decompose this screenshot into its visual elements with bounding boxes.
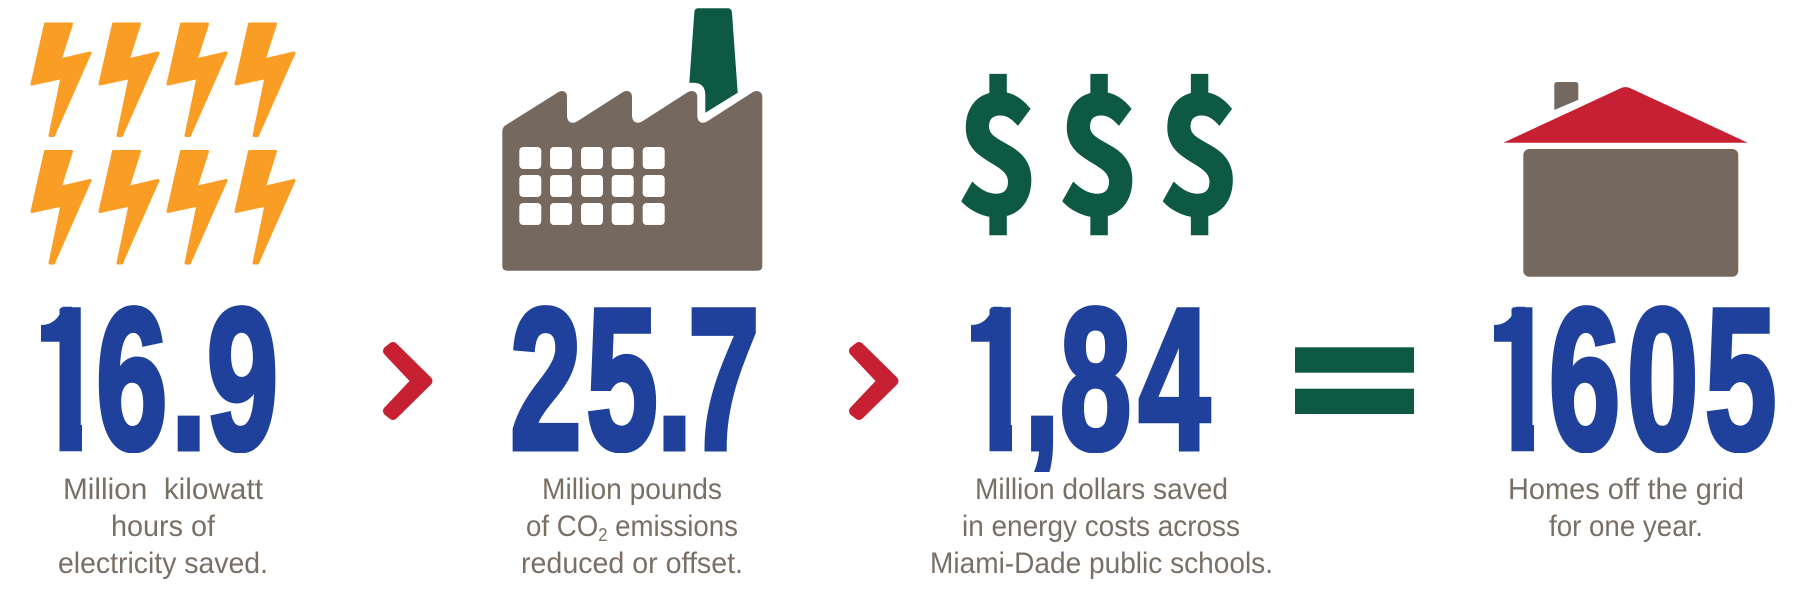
- icon: dollar signs: $: [957, 25, 1039, 260]
- caption: emissions: of CO: [526, 510, 604, 543]
- stat number: 1,84: 1: [961, 266, 1033, 491]
- caption: homes: [1508, 473, 1744, 543]
- caption: emissions: 2: [598, 525, 607, 545]
- stat number: 1,84: 84: [1060, 266, 1210, 491]
- caption: emissions: reduced or offset.: [521, 547, 743, 580]
- stat number: 1605: 1: [1483, 266, 1554, 491]
- caption: electricity: [58, 473, 268, 580]
- stat number: 16.9: 6.9: [96, 266, 278, 491]
- caption: dollars: [930, 473, 1273, 580]
- caption: dollars: Million dollars saved: [975, 473, 1228, 506]
- icon: dollar signs: [957, 25, 1241, 260]
- arrow: greater than: [388, 347, 428, 415]
- caption: electricity: Million kilowatt: [63, 473, 264, 506]
- caption: emissions: emissions: [607, 510, 738, 543]
- caption: homes: Homes off the grid: [1508, 473, 1744, 506]
- stat number: 25.7: 25.7: [510, 266, 760, 491]
- caption: emissions: [521, 473, 743, 580]
- caption: homes: for one year.: [1549, 510, 1703, 543]
- caption: dollars: in energy costs across: [962, 510, 1240, 543]
- stat number: 16.9: 1: [31, 266, 103, 491]
- icon: lightning bolts: [32, 24, 294, 263]
- arrow: greater than: [854, 347, 894, 415]
- icon: dollar signs: $: [1058, 25, 1140, 260]
- stat number: 1605: 605: [1549, 266, 1777, 491]
- icon: dollar signs: $: [1158, 25, 1241, 260]
- caption: electricity: electricity saved.: [58, 547, 268, 580]
- equals sign: [1295, 347, 1414, 414]
- icon: house: [1503, 82, 1748, 277]
- stat number: 1605: [1494, 305, 1775, 453]
- caption: emissions: Million pounds: [542, 473, 722, 506]
- caption: electricity: hours of: [111, 510, 216, 543]
- caption: dollars: Miami-Dade public schools.: [930, 547, 1273, 580]
- stat number: 1,84: ,: [1024, 266, 1060, 491]
- icon: factory: [502, 8, 762, 271]
- stat number: 16.9: [41, 305, 276, 453]
- stat number: 1,84: [971, 305, 1212, 472]
